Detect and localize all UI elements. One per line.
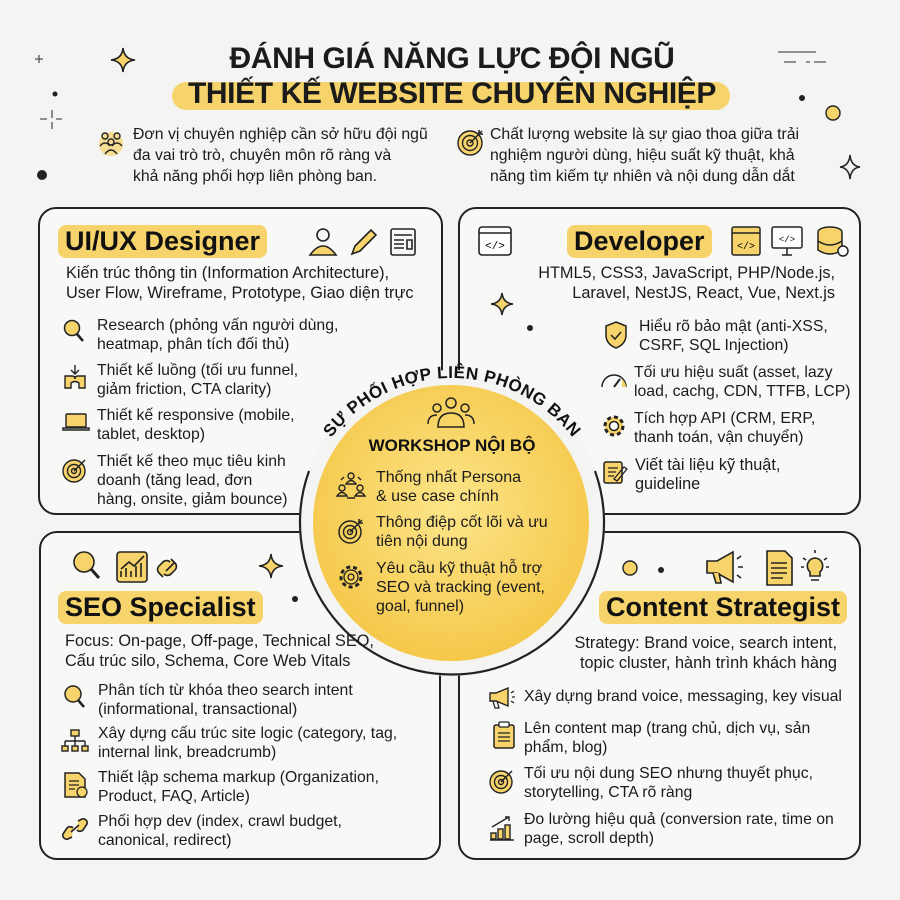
item: research: heatmap, phân tích đối thủ): [97, 336, 289, 353]
panel: Developer: Laravel, NestJS, React, Vue, Next.js: [572, 284, 835, 302]
workshop items: [336, 469, 548, 615]
title highlight: [172, 82, 730, 110]
item: site structure: internal link, breadcrumb): [98, 744, 276, 761]
item: tech requirements: Yêu cầu kỹ thuật hỗ trợ: [376, 560, 542, 577]
item: API: Tích hợp API (CRM, ERP,: [634, 410, 815, 427]
icon: target: [457, 130, 483, 156]
sparkle: [258, 554, 284, 578]
item: brand voice: [489, 687, 842, 709]
title: THIẾT KẾ WEBSITE CHUYÊN NGHIỆP: [188, 77, 716, 110]
intro left: khả năng phối hợp liên phòng ban.: [133, 168, 377, 185]
icon: code window: </>: [485, 241, 505, 253]
panel: SEO Specialist: Cấu trúc silo, Schema, Core Web Vitals: [65, 652, 350, 670]
item: tech requirements: [340, 559, 545, 615]
item: tech requirements: goal, funnel): [376, 598, 464, 615]
item: docs: Viết tài liệu kỹ thuật,: [635, 456, 780, 474]
item: tech requirements: SEO và tracking (event,: [376, 579, 545, 596]
item: content map: [493, 720, 810, 756]
item: flow: giảm friction, CTA clarity): [97, 381, 271, 398]
item: SEO content: [489, 765, 813, 801]
panel: Content Strategist: [458, 531, 861, 860]
item: research: [64, 317, 338, 353]
item: schema: Thiết lập schema markup (Organization,: [98, 769, 379, 786]
title: [172, 41, 730, 110]
item: measurement: Đo lường hiệu quả (conversion rate, time on: [524, 811, 834, 828]
icon: team: [99, 132, 123, 156]
item: keyword: [64, 682, 353, 718]
decorative circle and dot: [622, 560, 664, 576]
item: research: Research (phỏng vấn người dùng,: [97, 317, 338, 334]
item: security: Hiểu rõ bảo mật (anti-XSS,: [639, 318, 828, 335]
intro left: đa vai trò trò, chuyên môn rõ ràng và: [133, 147, 391, 164]
item: performance: [601, 364, 851, 400]
workshop title: WORKSHOP NỘI BỘ: [369, 436, 535, 455]
heading: UI/UX Designer: [65, 226, 260, 256]
item: measurement: [490, 811, 834, 847]
decorative marks: [35, 51, 860, 180]
item: keyword: Phân tích từ khóa theo search intent: [98, 682, 353, 699]
panel: Developer: [458, 207, 861, 515]
icons: search, chart, link: [73, 551, 178, 583]
item: keyword: (informational, transactional): [98, 701, 297, 718]
item: performance: load, cachg, CDN, TTFB, LCP): [634, 383, 851, 400]
item: security: [605, 318, 828, 354]
item: dev coordination: canonical, redirect): [98, 832, 231, 849]
panel: Developer: HTML5, CSS3, JavaScript, PHP/Node.js,: [538, 264, 835, 282]
item: business goal: [62, 453, 288, 508]
item: responsive: Thiết kế responsive (mobile,: [97, 407, 295, 424]
icons: megaphone, document, bulb: [706, 550, 829, 586]
item: site structure: Xây dựng cấu trúc site logic (category, tag,: [98, 725, 397, 742]
intro right: năng tìm kiếm tự nhiên và nội dung dẫn dắt: [490, 168, 795, 185]
panel: Content Strategist: topic cluster, hành trình khách hàng: [580, 654, 837, 672]
item: content map: Lên content map (trang chủ, dịch vụ, sản: [524, 720, 810, 737]
item: business goal: Thiết kế theo mục tiêu kinh: [97, 453, 286, 470]
item: message: tiên nội dung: [376, 533, 468, 550]
item: business goal: doanh (tăng lead, đơn: [97, 472, 252, 489]
item: flow: Thiết kế luồng (tối ưu funnel,: [97, 362, 298, 379]
heading: Content Strategist: [606, 592, 840, 622]
item: business goal: hàng, onsite, giảm bounce): [97, 491, 288, 508]
panel: UI/UX Designer: [38, 207, 443, 515]
sparkle: [490, 292, 514, 316]
icons: code, monitor, database: </>: [737, 241, 755, 253]
intro right: Chất lượng website là sự giao thoa giữa trải: [490, 126, 799, 143]
panel: SEO Specialist: Focus: On-page, Off-page, Technical SEO,: [65, 632, 374, 650]
panel: Content Strategist: Strategy: Brand voice, search intent,: [575, 634, 837, 652]
item: dev coordination: [62, 813, 342, 849]
icon: code window: [478, 226, 512, 256]
item: schema: [64, 769, 379, 805]
item: docs: guideline: [635, 475, 700, 493]
item: dev coordination: Phối hợp dev (index, crawl budget,: [98, 813, 342, 830]
item: responsive: [62, 407, 295, 443]
icons: user, pencil, layout: [308, 228, 416, 256]
title: ĐÁNH GIÁ NĂNG LỰC ĐỘI NGŨ: [230, 42, 674, 75]
item: message: [338, 514, 548, 550]
item: SEO content: Tối ưu nội dung SEO nhưng thuyết phục,: [524, 765, 813, 782]
item: persona: [336, 469, 522, 505]
item: persona: Thống nhất Persona: [376, 469, 521, 486]
item: content map: phẩm, blog): [524, 739, 607, 756]
item: SEO content: storytelling, CTA rõ ràng: [524, 784, 692, 801]
intro right: nghiệm người dùng, hiệu suất kỹ thuật, khả: [490, 147, 795, 164]
item: API: thanh toán, vận chuyển): [634, 429, 804, 446]
item: schema: Product, FAQ, Article): [98, 788, 250, 805]
item: site structure: [61, 725, 397, 761]
intro left: Đơn vị chuyên nghiệp cần sở hữu đội ngũ: [133, 126, 428, 143]
panel: SEO Specialist: [39, 531, 441, 860]
decorative sparkle left: [110, 48, 136, 72]
item: responsive: tablet, desktop): [97, 426, 205, 443]
item: API: [604, 410, 815, 446]
intro left: [99, 126, 428, 185]
intro right: [457, 126, 799, 185]
icons: code, monitor, database: [731, 226, 849, 257]
item: performance: Tối ưu hiệu suất (asset, lazy: [634, 364, 832, 381]
item: message: Thông điệp cốt lõi và ưu: [376, 514, 548, 531]
heading: Developer: [574, 226, 705, 256]
heading: SEO Specialist: [65, 592, 256, 622]
icons: code, monitor, database: </>: [779, 235, 795, 245]
item: persona: & use case chính: [376, 488, 499, 505]
item: docs: [603, 456, 780, 493]
curved heading: SỰ PHỐI HỢP LIÊN PHÒNG BAN: [324, 362, 581, 437]
panel: UI/UX Designer: User Flow, Wireframe, Prototype, Giao diện trực: [66, 284, 414, 302]
panel: UI/UX Designer: Kiến trúc thông tin (Information Architecture),: [66, 264, 389, 282]
item: measurement: page, scroll depth): [524, 830, 654, 847]
item: brand voice: Xây dựng brand voice, messaging, key visual: [524, 688, 842, 705]
item: security: CSRF, SQL Injection): [639, 337, 789, 354]
icon: team: [428, 398, 474, 427]
item: flow: [64, 362, 298, 398]
